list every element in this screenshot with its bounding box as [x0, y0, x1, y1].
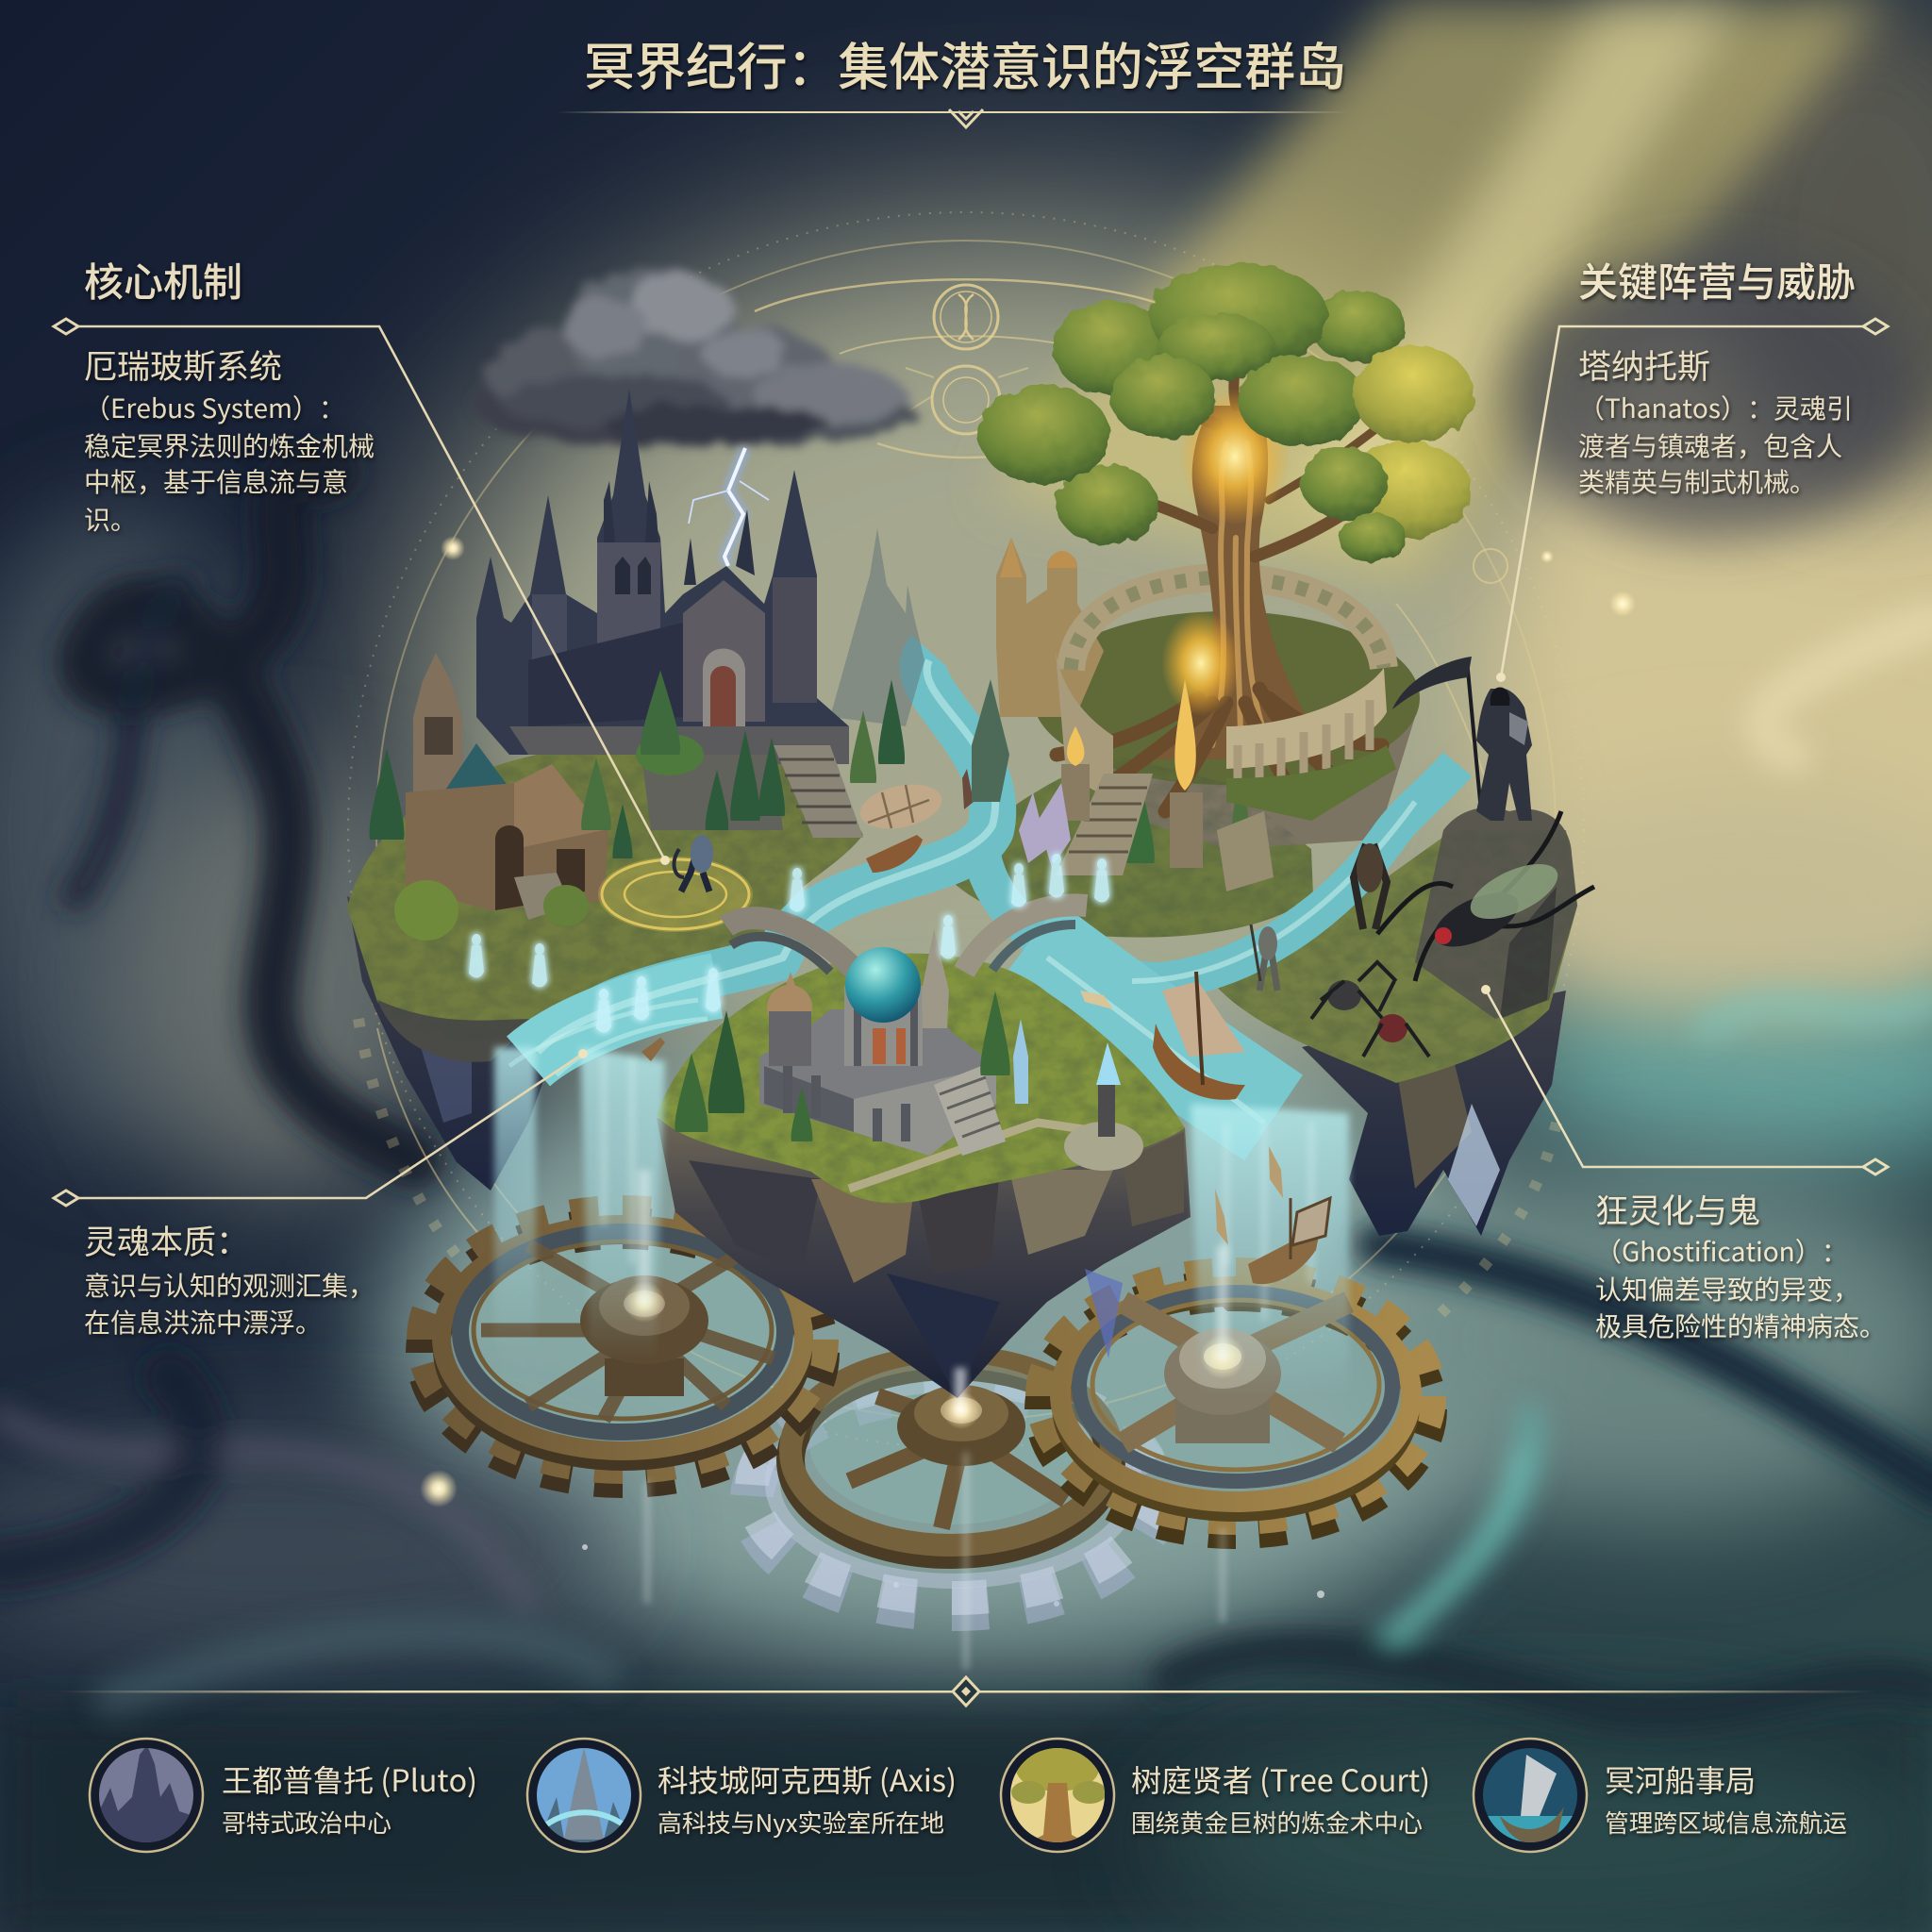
golden world tree — [978, 263, 1474, 811]
heading: factions and threats: 关键阵营与威胁 — [1578, 251, 1856, 308]
river: teal information flow — [509, 651, 1457, 1123]
gear: middle brass gear — [791, 1357, 1111, 1555]
bottom divider — [57, 1677, 1877, 1706]
panel: soul essence — [54, 1049, 588, 1341]
lightning bolt — [689, 448, 769, 566]
text: Thanatos: 渡者与镇魂者，包含人 — [1578, 426, 1842, 464]
label: Tree Court — [1131, 1757, 1430, 1840]
castle: brown chapel — [406, 653, 608, 920]
label: Pluto — [222, 1757, 477, 1840]
orbit diagram: arcs, dotted rings and alchemical symbols — [348, 212, 1584, 1448]
stairs and torches — [1019, 679, 1274, 891]
label: Tree Court: 树庭贤者 (Tree Court) — [1131, 1757, 1430, 1801]
leader line: ghostification — [1481, 985, 1888, 1174]
text: Thanatos: 类精英与制式机械。 — [1578, 462, 1816, 500]
text: Erebus System: （Erebus System）： — [84, 389, 345, 426]
ships on the river — [641, 972, 1330, 1284]
gear: left brass gear — [426, 1215, 819, 1477]
island: central rock underside — [657, 1118, 1191, 1398]
colosseum ring front — [1056, 651, 1396, 821]
label: Pluto: 哥特式政治中心 — [222, 1805, 391, 1840]
text: ghostification: 认知偏差导致的异变， — [1595, 1270, 1859, 1307]
legend: Axis — [527, 1739, 957, 1852]
text: ghostification: 极具危险性的精神病态。 — [1595, 1307, 1886, 1344]
label: Styx shipping bureau: 冥河船事局 — [1605, 1757, 1756, 1801]
label: Axis: 高科技与Nyx实验室所在地 — [658, 1805, 944, 1840]
leader line: Erebus System — [54, 319, 670, 865]
waterfalls flowing to gears — [494, 1047, 1349, 1670]
title divider ornament — [557, 109, 1349, 127]
text: Thanatos — [1578, 341, 1853, 500]
character: Thanatos reaper on crag — [1392, 657, 1532, 821]
label: Tree Court: 围绕黄金巨树的炼金术中心 — [1131, 1805, 1423, 1840]
text: Thanatos: （Thanatos）：灵魂引 — [1578, 389, 1853, 426]
panel: core mechanics — [54, 251, 670, 865]
citadel: Axis tech city with orb dome — [675, 929, 1143, 1171]
trees: cypress groves — [370, 670, 1249, 941]
leader line: soul essence — [54, 1049, 588, 1206]
legend: Tree Court — [1001, 1739, 1430, 1852]
panel: key factions and threats — [1496, 251, 1888, 682]
souls: glowing spirit figures along the river — [469, 854, 1109, 1033]
castle: Pluto gothic cathedral — [476, 389, 924, 838]
text: Erebus System: 中枢，基于信息流与意 — [84, 462, 348, 500]
island: left grassy plateau — [347, 738, 863, 1062]
text: Erebus System: 稳定冥界法则的炼金机械 — [84, 426, 375, 464]
gear: crystal lower gear — [752, 1379, 1156, 1609]
icon: tech tower — [527, 1739, 641, 1852]
label: Styx shipping bureau — [1605, 1757, 1847, 1840]
panel: ghostification — [1481, 985, 1888, 1344]
text: ghostification — [1595, 1185, 1886, 1344]
creatures: giant insect and spiders — [1251, 811, 1594, 1057]
colosseum ring back — [1071, 577, 1384, 670]
island: right plateau with grey crag — [1213, 808, 1577, 1083]
text: Erebus System: 厄瑞玻斯系统 — [84, 341, 282, 389]
text: Thanatos: 塔纳托斯 — [1578, 341, 1710, 389]
island: tree terrace and cliff — [943, 611, 1420, 938]
text: ghostification: （Ghostification）： — [1595, 1232, 1848, 1270]
legend: Styx shipping bureau — [1474, 1739, 1847, 1854]
text: ghostification: 狂灵化与鬼 — [1595, 1185, 1760, 1233]
text: soul essence: 灵魂本质： — [84, 1216, 249, 1264]
icon: gothic castle — [90, 1739, 203, 1852]
castle: golden town behind the tree — [972, 538, 1104, 802]
text: Erebus System: 识。 — [84, 500, 137, 538]
icon: golden tree — [1001, 1739, 1114, 1852]
moss texture on grass plateaus — [347, 755, 1573, 1070]
leader line: Thanatos — [1496, 319, 1888, 682]
legend: Pluto — [90, 1739, 477, 1852]
island: right rock underside — [1302, 991, 1566, 1236]
gear: right brass gear — [1045, 1277, 1426, 1528]
storm cloud — [472, 268, 915, 445]
label: Styx shipping bureau: 管理跨区域信息流航运 — [1605, 1805, 1847, 1840]
bridges — [726, 905, 1087, 972]
title: 冥界纪行：集体潜意识的浮空群岛 — [584, 25, 1346, 100]
text: soul essence — [84, 1216, 375, 1341]
island: left rock underside — [347, 896, 566, 1191]
airship and skiff on the river — [856, 769, 974, 873]
icon: sailing ship — [1474, 1739, 1587, 1854]
text: Erebus System — [84, 341, 375, 538]
text: soul essence: 在信息洪流中漂浮。 — [84, 1303, 322, 1341]
label: Pluto: 王都普鲁托 (Pluto) — [222, 1757, 477, 1801]
magic circle with Erebus figure — [598, 835, 753, 932]
label: Axis — [658, 1757, 957, 1840]
text: soul essence: 意识与认知的观测汇集， — [84, 1266, 375, 1304]
island: central grassy plateau — [657, 953, 1185, 1204]
heading: core mechanics: 核心机制 — [84, 251, 242, 308]
label: Axis: 科技城阿克西斯 (Axis) — [658, 1757, 957, 1801]
